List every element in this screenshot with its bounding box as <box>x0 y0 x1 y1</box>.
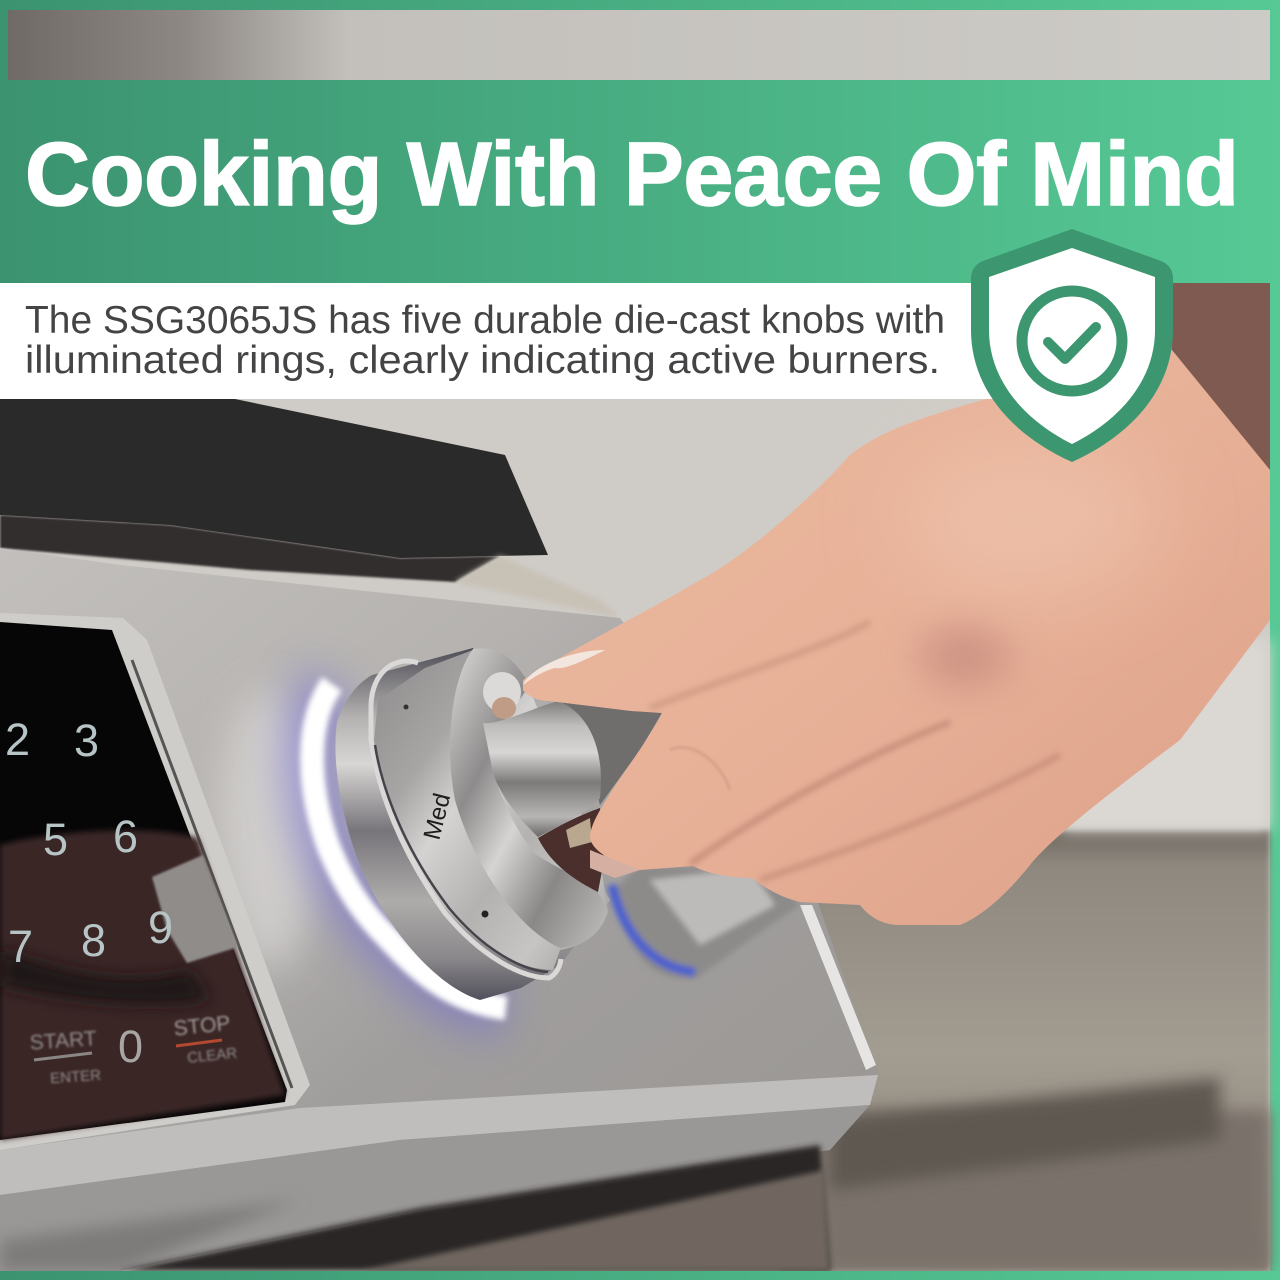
display window: START <box>29 1027 98 1055</box>
keypad digits: 5 <box>43 814 68 865</box>
illuminated ring <box>312 684 506 1008</box>
stainless control panel <box>0 548 878 1225</box>
keypad digits: 2 <box>5 714 30 765</box>
display window <box>0 613 310 1150</box>
hand <box>523 350 1270 925</box>
top photo strip <box>8 10 1270 80</box>
rear knob <box>612 865 800 979</box>
knob grip stem <box>483 701 601 837</box>
white subtitle band <box>0 283 1000 399</box>
keypad digits: 8 <box>81 915 106 966</box>
dark recess <box>538 808 604 892</box>
subtitle text: illuminated rings, clearly indicating active burners. <box>25 339 940 382</box>
knob label: Med <box>419 791 456 842</box>
label surface <box>374 649 608 970</box>
raised rim <box>450 648 608 948</box>
panel lower edge <box>0 1075 878 1195</box>
keypad digits: 9 <box>148 902 173 953</box>
dark burner grate <box>0 399 548 558</box>
main knob <box>335 648 662 1000</box>
title: Cooking With Peace Of Mind <box>25 125 1239 225</box>
display window: CLEAR <box>186 1045 238 1067</box>
keypad digits: 7 <box>8 921 33 972</box>
panel highlights <box>220 690 320 970</box>
display window: ENTER <box>50 1067 102 1087</box>
keypad digits <box>5 714 173 1072</box>
thin chrome ring <box>371 661 561 978</box>
keypad digits: 6 <box>113 811 138 862</box>
sleeve <box>1170 283 1270 470</box>
grate underside shadow <box>0 515 500 582</box>
outer base <box>335 648 610 1000</box>
display window: STOP <box>173 1012 232 1041</box>
header band <box>0 80 1280 283</box>
photo: stove control panel and hand <box>0 283 1270 1271</box>
icon: safety shield with check mark <box>971 229 1173 462</box>
keypad digits: 3 <box>74 715 99 766</box>
background: counter and blurred cabinet <box>780 640 1270 1271</box>
keypad digits: 0 <box>118 1021 143 1072</box>
finger hole <box>483 672 521 712</box>
knob grip shadow side <box>559 701 662 805</box>
bottom frame edge <box>0 1271 1280 1280</box>
subtitle text <box>25 299 945 382</box>
subtitle text: The SSG3065JS has five durable die-cast knobs with <box>25 299 945 342</box>
